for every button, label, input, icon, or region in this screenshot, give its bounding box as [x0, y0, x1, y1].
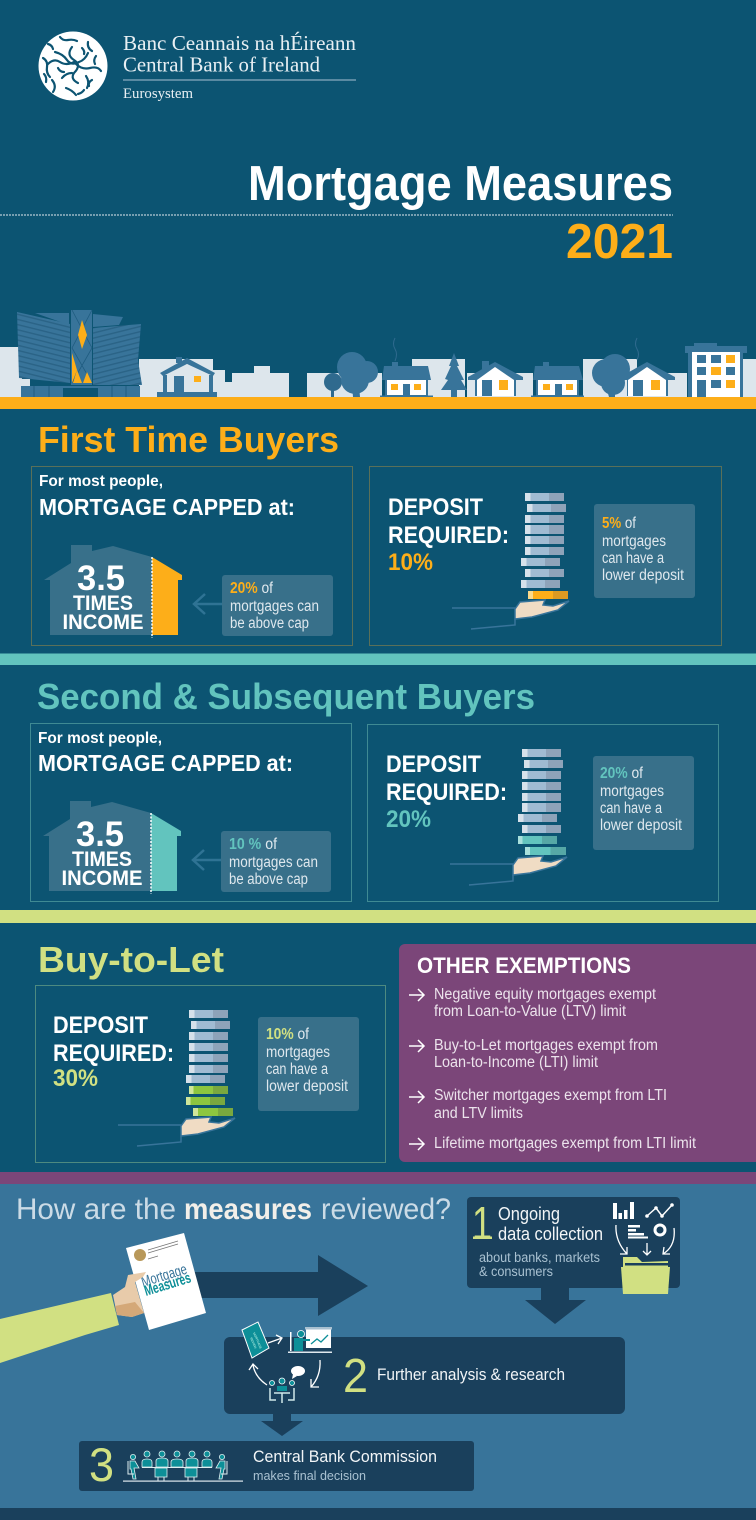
callout: 10% of	[266, 1026, 310, 1043]
panel: deposit: 30%	[53, 1065, 98, 1092]
step 3 number: 3	[89, 1438, 114, 1491]
band: purple	[0, 1172, 756, 1184]
heading	[16, 1193, 451, 1226]
panel: mortgage cap: For most people,	[39, 473, 163, 490]
panel: deposit	[368, 724, 718, 902]
callout: mortgages can	[229, 854, 318, 871]
section: Second & Subsequent Buyers	[30, 676, 718, 902]
hand	[113, 1272, 146, 1317]
icon: research cycle: REVIEW	[249, 1337, 258, 1349]
step 1 number: 1	[472, 1197, 492, 1249]
arrow: large right	[190, 1255, 368, 1316]
heading: OTHER EXEMPTIONS	[417, 953, 631, 978]
step 1 text: about banks, markets	[479, 1250, 600, 1265]
house graphic: TIMES	[72, 848, 132, 871]
house graphic: 3.5	[77, 559, 125, 598]
house graphic: 3.5	[76, 815, 124, 854]
coin stack and hand	[450, 749, 567, 885]
cottage 4	[531, 362, 584, 397]
step 2 number: 2	[343, 1350, 368, 1403]
house graphic: TIMES	[73, 592, 133, 615]
callout	[221, 831, 331, 892]
exemption 3: and LTV limits	[434, 1105, 523, 1122]
panel: mortgage cap: For most people,	[38, 730, 162, 747]
exemption 1: Negative equity mortgages exempt	[434, 986, 657, 1003]
folder	[621, 1257, 670, 1294]
step 1 box	[467, 1197, 680, 1294]
house graphic: INCOME	[62, 611, 144, 634]
coin stack and hand	[452, 493, 569, 629]
panel: deposit: DEPOSIT	[386, 751, 481, 778]
panel: deposit: DEPOSIT	[53, 1012, 148, 1039]
logo text: Eurosystem	[123, 86, 194, 102]
convention centre building	[17, 310, 142, 397]
heading: How are the	[16, 1193, 176, 1226]
title	[0, 157, 673, 269]
exemption 1	[409, 986, 657, 1020]
step 2 text: Further analysis & research	[377, 1366, 565, 1384]
step 1 text: & consumers	[479, 1264, 553, 1279]
cottage 2	[380, 362, 433, 397]
callout: 20% of	[230, 580, 274, 597]
callout: can have a	[602, 550, 664, 567]
document: Measures	[142, 1270, 193, 1300]
arrow: step 1 to step 2	[525, 1288, 586, 1324]
house graphic: INCOME	[62, 867, 142, 890]
arrow: step 2 to step 3	[261, 1414, 303, 1436]
step 3 text: makes final decision	[253, 1468, 366, 1483]
step 1 text: Ongoing	[498, 1204, 560, 1224]
panel: deposit: 20%	[386, 806, 431, 833]
exemption 1: from Loan-to-Value (LTV) limit	[434, 1003, 627, 1020]
callout	[593, 756, 694, 850]
exemption 2	[409, 1037, 658, 1071]
panel: other exemptions	[399, 944, 756, 1162]
house graphic	[44, 545, 182, 638]
arrow	[194, 594, 222, 614]
panel: deposit: DEPOSIT	[388, 494, 483, 521]
panel: deposit: REQUIRED:	[388, 522, 509, 549]
section: review process	[0, 1184, 756, 1508]
callout	[258, 1017, 359, 1111]
panel: mortgage cap: MORTGAGE CAPPED at:	[39, 494, 295, 520]
callout: 10 % of	[229, 836, 278, 853]
step 1 text: data collection	[498, 1224, 603, 1244]
house 3	[468, 361, 523, 396]
step 3 text: Central Bank Commission	[253, 1448, 437, 1466]
chimney smoke	[394, 338, 638, 361]
heading: Second & Subsequent Buyers	[37, 676, 535, 717]
panel: mortgage cap	[30, 724, 352, 902]
callout: mortgages can	[230, 598, 319, 615]
house 5	[620, 362, 675, 396]
step 3 box	[79, 1438, 474, 1491]
house 1	[157, 357, 217, 397]
logo: Central Bank of Ireland	[38, 31, 356, 102]
band: teal	[0, 654, 756, 665]
band: lime	[0, 910, 756, 923]
logo text: Central Bank of Ireland	[123, 52, 320, 76]
callout: can have a	[600, 800, 662, 817]
panel: mortgage cap: MORTGAGE CAPPED at:	[38, 750, 293, 776]
callout: can have a	[266, 1061, 328, 1078]
document: Mortgage	[139, 1261, 189, 1291]
title: 2021	[566, 215, 673, 269]
callout: mortgages	[600, 783, 664, 800]
arrow	[193, 850, 221, 870]
panel: deposit: 10%	[388, 549, 433, 576]
logo text: Banc Ceannais na hÉireann	[123, 31, 356, 55]
panel: deposit: REQUIRED:	[53, 1040, 174, 1067]
panel: mortgage cap	[32, 466, 352, 646]
callout	[594, 504, 695, 598]
panel: deposit: REQUIRED:	[386, 779, 507, 806]
section: Buy-to-Let	[36, 939, 386, 1162]
exemption 3: Switcher mortgages exempt from LTI	[434, 1087, 667, 1104]
background blocks	[0, 347, 756, 397]
callout: mortgages	[602, 533, 666, 550]
exemption 2: Loan-to-Income (LTI) limit	[434, 1054, 599, 1071]
title: Mortgage Measures	[248, 157, 673, 211]
logo text	[123, 31, 356, 102]
callout: lower deposit	[600, 817, 683, 834]
section: First Time Buyers	[32, 419, 722, 646]
step 3 text	[253, 1448, 437, 1483]
callout: mortgages	[266, 1044, 330, 1061]
icon: commission table	[123, 1451, 243, 1482]
sleeve	[0, 1293, 119, 1363]
exemption 4: Lifetime mortgages exempt from LTI limit	[434, 1135, 697, 1152]
apartment block	[685, 343, 747, 397]
document	[126, 1233, 206, 1330]
exemption 3	[409, 1087, 667, 1122]
logo emblem	[38, 32, 108, 100]
heading: First Time Buyers	[38, 419, 339, 460]
callout: lower deposit	[602, 567, 685, 584]
trees	[324, 352, 630, 397]
callout: be above cap	[229, 871, 308, 888]
panel: deposit	[36, 986, 386, 1162]
pine tree	[441, 353, 467, 397]
callout	[222, 575, 333, 636]
icon: research cycle	[242, 1322, 332, 1403]
hand holding document	[0, 1233, 206, 1363]
heading: Buy-to-Let	[38, 939, 224, 980]
exemption 2: Buy-to-Let mortgages exempt from	[434, 1037, 658, 1054]
callout: 5% of	[602, 515, 637, 532]
heading: reviewed?	[321, 1193, 451, 1226]
house graphic	[43, 801, 181, 894]
callout: 20% of	[600, 765, 644, 782]
callout: be above cap	[230, 615, 309, 632]
step 1 text	[479, 1204, 603, 1279]
callout: lower deposit	[266, 1078, 349, 1095]
coin stack and hand	[118, 1010, 235, 1146]
band: yellow	[0, 397, 756, 409]
skyline illustration	[0, 310, 756, 397]
step 2 box	[224, 1322, 625, 1414]
footer band	[0, 1508, 756, 1520]
heading: measures	[184, 1193, 312, 1226]
icon: data into folder	[613, 1202, 674, 1294]
panel: deposit	[370, 466, 722, 646]
icon: research cycle: MORTGAGE	[252, 1332, 263, 1349]
